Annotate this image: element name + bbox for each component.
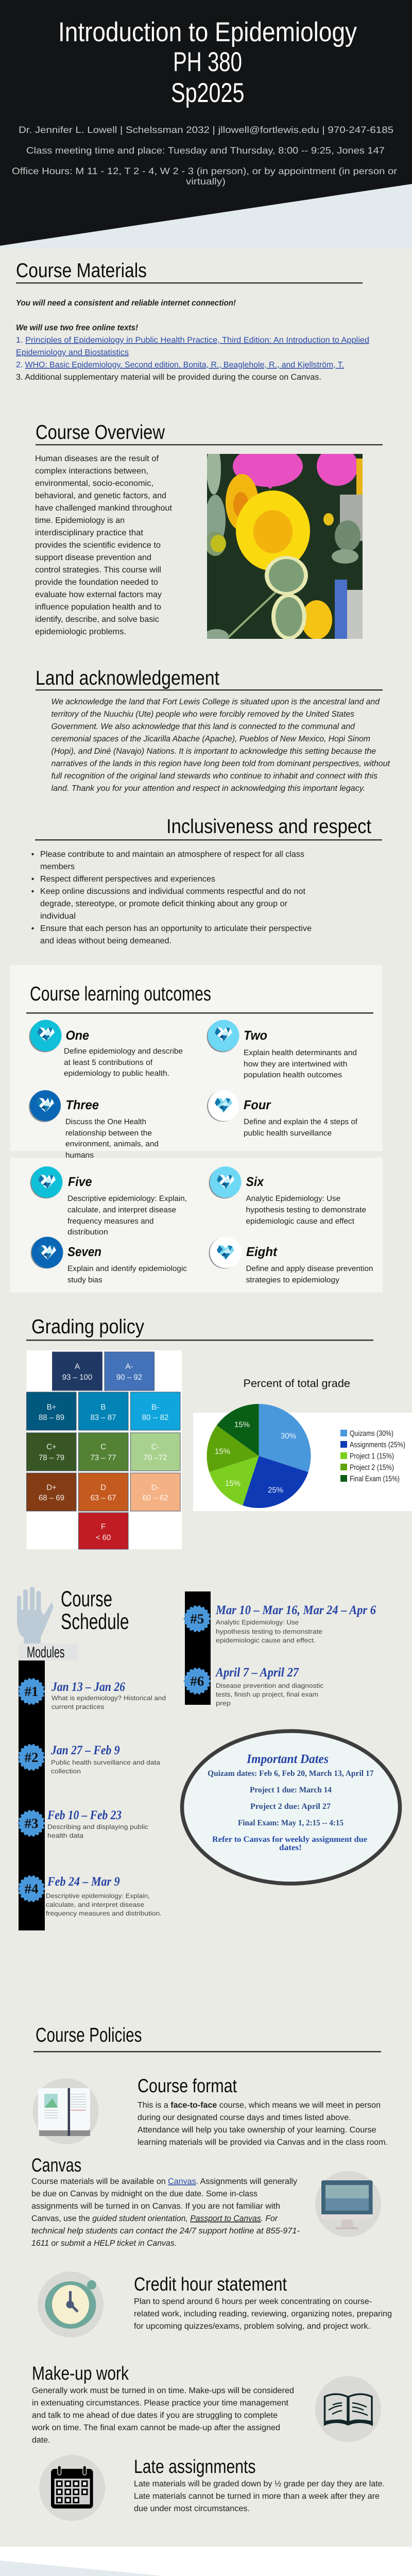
panel: course overview bbox=[35, 421, 383, 643]
outcome six: epidemiologic cause and effect bbox=[246, 1217, 355, 1226]
title: Introduction to Epidemiology bbox=[58, 17, 357, 47]
module 1: Jan 13 – Jan 26 bbox=[51, 1680, 125, 1694]
grade scale table: C+ bbox=[46, 1443, 57, 1451]
callout: important dates bbox=[182, 1731, 400, 1884]
module 6: tests, finish up project, final exam bbox=[216, 1691, 318, 1698]
outcome six bbox=[209, 1166, 366, 1226]
outcome four: Four bbox=[244, 1098, 271, 1112]
module 6 bbox=[185, 1666, 323, 1707]
photo: flowers bbox=[204, 443, 363, 643]
materials text: 1. Principles of Epidemiology in Public Health Practice, Third Edition: An Introduction to Applied bbox=[16, 336, 369, 345]
module 6: Disease prevention and diagnostic bbox=[216, 1682, 323, 1689]
bulleted list: degrade, stereotype, or promote deficit thinking about any group or bbox=[40, 900, 288, 908]
grade scale table: 63 – 67 bbox=[90, 1494, 116, 1502]
overview paragraph: complex interactions between, bbox=[35, 467, 148, 476]
module 4 bbox=[20, 1875, 162, 1917]
heading: course policies: Course Policies bbox=[36, 2024, 142, 2046]
policy: make-up work bbox=[31, 2363, 294, 2445]
grade scale table: 60 – 62 bbox=[142, 1494, 168, 1502]
module 5: Analytic Epidemiology: Use bbox=[216, 1619, 299, 1626]
grade scale table: 80 -- 82 bbox=[142, 1413, 168, 1422]
outcome five: calculate, and interpret disease bbox=[67, 1206, 176, 1214]
overview paragraph: Human diseases are the result of bbox=[35, 454, 159, 463]
callout: important dates: Important Dates bbox=[246, 1752, 329, 1766]
pie chart: percent of total grade bbox=[193, 1404, 412, 1511]
instructor and class details bbox=[12, 125, 397, 187]
bulleted list: individual bbox=[40, 912, 76, 921]
outcome seven: Explain and identify epidemiologic bbox=[67, 1264, 187, 1273]
heading: course schedule: Course bbox=[61, 1587, 112, 1612]
policy: canvas: Course materials will be available on Canvas. Assignments will generally bbox=[31, 2177, 297, 2186]
bulleted list bbox=[31, 850, 312, 945]
module 6: prep bbox=[216, 1700, 231, 1707]
module 6: #6 bbox=[190, 1673, 204, 1689]
outcome one: at least 5 contributions of bbox=[64, 1058, 153, 1067]
overview paragraph bbox=[35, 454, 173, 636]
outcome eight: strategies to epidemiology bbox=[246, 1276, 340, 1284]
materials text: Epidemiology and Biostatistics bbox=[16, 348, 129, 357]
module 1: current practices bbox=[52, 1703, 104, 1710]
policy: canvas: Canvas bbox=[31, 2155, 81, 2176]
outcome two: population health outcomes bbox=[244, 1071, 342, 1079]
overview paragraph: environmental, socio-economic, bbox=[35, 479, 153, 488]
pie chart: percent of total grade: 15% bbox=[234, 1420, 250, 1429]
materials text: We will use two free online texts! bbox=[16, 324, 139, 332]
title: Sp2025 bbox=[171, 78, 244, 108]
outcome three: relationship between the bbox=[65, 1129, 152, 1138]
grade scale table: B+ bbox=[47, 1403, 57, 1412]
outcome two: Two bbox=[244, 1028, 267, 1043]
policy: make-up work: in extenuating circumstances. Please practice your time management bbox=[32, 2399, 289, 2408]
outcome five: Five bbox=[68, 1175, 92, 1189]
acknowledgement text: territory of the Nuuchiu (Ute) people who were forcibly removed by the United States bbox=[52, 710, 354, 719]
policy: canvas bbox=[31, 2155, 300, 2248]
overview paragraph: interdisciplinary practice that bbox=[35, 529, 144, 537]
bulleted list: members bbox=[40, 862, 75, 871]
heading: grading policy: Grading policy bbox=[31, 1316, 144, 1338]
grade scale table: 78 – 79 bbox=[39, 1453, 64, 1462]
overview paragraph: support disease prevention and bbox=[35, 553, 151, 562]
grade scale table: D+ bbox=[46, 1483, 57, 1492]
outcome two bbox=[207, 1020, 357, 1079]
outcome two: Explain health determinants and bbox=[244, 1048, 357, 1057]
pie chart: percent of total grade: 25% bbox=[268, 1486, 283, 1495]
callout: important dates: dates! bbox=[279, 1843, 302, 1852]
panel: course materials bbox=[16, 260, 369, 382]
policy: make-up work: Make-up work bbox=[32, 2363, 129, 2384]
timeline bar: left bbox=[19, 1660, 45, 1930]
panel: course learning outcomes bbox=[10, 965, 383, 1293]
heading: course learning outcomes: Course learning outcomes bbox=[30, 983, 211, 1005]
policy: make-up work: work on time. The final exam cannot be made-up after the assigned bbox=[31, 2424, 280, 2432]
policy: course format: Attendance will help you take ownership of your learning. Course bbox=[138, 2126, 376, 2134]
module 4: #4 bbox=[25, 1881, 38, 1896]
callout: important dates: Quizam dates: Feb 6, Feb 20, March 13, April 17 bbox=[208, 1769, 374, 1778]
heading: course schedule bbox=[61, 1587, 129, 1634]
outcome five bbox=[30, 1166, 187, 1236]
acknowledgement text bbox=[52, 698, 390, 793]
module 5: Mar 10 – Mar 16, Mar 24 – Apr 6 bbox=[215, 1603, 376, 1617]
policy: course format: learning materials will be provided via Canvas and in the class room. bbox=[138, 2138, 388, 2147]
grade scale table: 90 – 92 bbox=[116, 1373, 142, 1382]
chart legend: Quizams (30%) bbox=[350, 1429, 393, 1438]
bulleted list: Respect different perspectives and experiences bbox=[40, 875, 215, 884]
outcome six: Analytic Epidemiology: Use bbox=[246, 1194, 340, 1203]
outcome four bbox=[207, 1090, 358, 1138]
outcome seven: Seven bbox=[67, 1245, 101, 1259]
pie chart: percent of total grade: 30% bbox=[281, 1432, 296, 1440]
module 1: #1 bbox=[25, 1684, 38, 1699]
overview paragraph: provide the foundation needed to bbox=[35, 578, 158, 587]
policy: credit hour statement bbox=[134, 2274, 392, 2331]
policy: make-up work: and talk to me ahead of due dates if you are struggling to complete bbox=[32, 2411, 278, 2420]
acknowledgement text: narratives of the lands in this region have long been told from dominant perspectives, without bbox=[52, 759, 390, 768]
panel: inclusiveness and respect bbox=[31, 816, 382, 945]
overview paragraph: have challenged mankind throughout bbox=[35, 504, 173, 513]
policy: credit hour statement: for upcoming quizzes/exams, problem solving, and project work. bbox=[134, 2322, 370, 2331]
module 3: health data bbox=[47, 1832, 83, 1839]
acknowledgement text: full recognition of the original land stewards who continue to inhabit and connect with this bbox=[52, 772, 377, 781]
module 5 bbox=[185, 1603, 376, 1644]
timeline bar: right bbox=[185, 1591, 211, 1705]
overview paragraph: epidemiologic problems. bbox=[35, 628, 126, 636]
grade scale table: 83 – 87 bbox=[90, 1413, 116, 1422]
grade scale table: < 60 bbox=[96, 1533, 111, 1542]
materials text: 2. WHO: Basic Epidemiology. Second edition. Bonita, R., Beaglehole, R., and Kjellström, T. bbox=[16, 361, 344, 369]
grade scale table: A bbox=[75, 1362, 80, 1371]
policy: canvas: technical help students can contact the 24/7 support hotline at 855-971- bbox=[31, 2227, 300, 2235]
chart legend bbox=[340, 1429, 405, 1483]
icon: calendar bbox=[39, 2455, 105, 2521]
module 3: Describing and displaying public bbox=[47, 1823, 148, 1831]
panel: additional policies bbox=[0, 2561, 412, 2576]
module 3: #3 bbox=[25, 1816, 38, 1831]
module 3 bbox=[20, 1808, 148, 1839]
heading: land acknowledgement: Land acknowledgement bbox=[36, 667, 219, 689]
overview paragraph: influence population health and to bbox=[35, 603, 161, 612]
module 2: collection bbox=[51, 1768, 81, 1775]
module 3: Feb 10 – Feb 23 bbox=[47, 1808, 122, 1822]
outcome eight bbox=[209, 1236, 373, 1284]
callout: important dates: Refer to Canvas for weekly assignment due bbox=[212, 1835, 367, 1844]
outcome one: epidemiology to public health. bbox=[64, 1069, 169, 1078]
policy: late assignments: Late materials will be graded down by ½ grade per day they are late. bbox=[134, 2480, 385, 2488]
instructor and class details: Class meeting time and place: Tuesday and Thursday, 8:00 -- 9:25, Jones 147 bbox=[26, 145, 385, 156]
outcome five: frequency measures and bbox=[67, 1217, 153, 1226]
grade scale table bbox=[27, 1350, 182, 1549]
outcome three: humans bbox=[65, 1151, 94, 1160]
policy: credit hour statement: Plan to spend around 6 hours per week concentrating on course- bbox=[134, 2297, 372, 2306]
overview paragraph: time. Epidemiology is an bbox=[35, 516, 125, 525]
panel: grading policy bbox=[26, 1316, 412, 1549]
heading: course overview: Course Overview bbox=[36, 421, 165, 444]
module 1 bbox=[20, 1680, 166, 1710]
policy: canvas: 1611 or submit a HELP ticket in Canvas. bbox=[31, 2239, 177, 2248]
policy: make-up work: date. bbox=[32, 2436, 50, 2445]
instructor and class details: Office Hours: M 11 - 12, T 2 - 4, W 2 - 3 (in person), or by appointment (in person or bbox=[12, 166, 397, 176]
outcome five: Descriptive epidemiology: Explain, bbox=[67, 1194, 187, 1203]
header banner bbox=[0, 0, 412, 246]
policy: late assignments bbox=[134, 2456, 385, 2513]
outcome two: how they are intertwined with bbox=[244, 1060, 347, 1069]
module 2: Jan 27 – Feb 9 bbox=[50, 1743, 120, 1757]
bulleted list: Please contribute to and maintain an atmosphere of respect for all class bbox=[40, 850, 304, 859]
grade scale table: 70 –72 bbox=[144, 1453, 167, 1462]
policy: canvas: be due on Canvas by midnight on the due date. Some in-class bbox=[31, 2190, 258, 2198]
acknowledgement text: Government. We also acknowledge that this land is connected to the communal and bbox=[52, 722, 355, 731]
chart legend: Project 1 (15%) bbox=[350, 1452, 394, 1461]
module 2: Public health surveillance and data bbox=[51, 1759, 160, 1766]
module 4: frequency measures and distribution. bbox=[46, 1910, 162, 1917]
outcome one: Define epidemiology and describe bbox=[64, 1047, 183, 1056]
policy: canvas: assignments will be turned in on Canvas. If you are not familiar with bbox=[31, 2202, 280, 2211]
policy: course format: during our designated course days and times listed above. bbox=[138, 2113, 351, 2122]
grade scale table: C- bbox=[151, 1443, 159, 1451]
outcome three: Discuss the One Health bbox=[65, 1117, 146, 1126]
pie chart: percent of total grade: 15% bbox=[215, 1447, 230, 1456]
outcome six: hypothesis testing to demonstrate bbox=[246, 1206, 366, 1214]
materials text: 3. Additional supplementary material will be provided during the course on Canvas. bbox=[16, 373, 321, 382]
module 5: epidemiologic cause and effect. bbox=[216, 1637, 316, 1644]
acknowledgement text: land. Thank you for your attention and respect in acknowledging this important legacy. bbox=[52, 784, 365, 793]
policy: credit hour statement: Credit hour statement bbox=[134, 2274, 287, 2295]
policy: course format bbox=[138, 2075, 388, 2147]
policy: course format: This is a face-to-face course, which means we will meet in person bbox=[138, 2101, 381, 2110]
policy: late assignments: Late materials cannot be turned in more than a week after they are bbox=[134, 2492, 380, 2501]
outcome six: Six bbox=[246, 1175, 264, 1189]
outcome one bbox=[29, 1020, 183, 1078]
bulleted list: Ensure that each person has an opportunity to articulate their perspective bbox=[40, 924, 312, 933]
outcome three bbox=[29, 1090, 159, 1160]
outcome eight: Eight bbox=[246, 1245, 278, 1259]
outcome seven bbox=[31, 1236, 187, 1284]
panel: land acknowledgement bbox=[36, 667, 390, 793]
module 4: Descriptive epidemiology: Explain, bbox=[46, 1892, 150, 1900]
module 5: hypothesis testing to demonstrate bbox=[216, 1628, 322, 1635]
title: PH 380 bbox=[173, 47, 242, 77]
policy: course format: Course format bbox=[138, 2075, 237, 2096]
acknowledgement text: ceremonial spaces of the Jicarilla Abache (Apache), Pueblos of New Mexico, Hopi Sinom bbox=[52, 735, 370, 743]
outcome eight: Define and apply disease prevention bbox=[246, 1264, 373, 1273]
callout: important dates: Project 2 due: April 27 bbox=[250, 1802, 331, 1811]
instructor and class details: Dr. Jennifer L. Lowell | Schelssman 2032 | jllowell@fortlewis.edu | 970-247-6185 bbox=[19, 125, 393, 135]
acknowledgement text: We acknowledge the land that Fort Lewis College is situated upon is the ancestral land and bbox=[52, 698, 380, 706]
title bbox=[58, 17, 357, 108]
grade scale table: D- bbox=[151, 1483, 159, 1492]
outcome one: One bbox=[66, 1028, 89, 1043]
heading: inclusiveness and respect: Inclusiveness and respect bbox=[166, 816, 371, 838]
policy: credit hour statement: related work, including reading, reviewing, organizing notes, preparing bbox=[134, 2310, 392, 2318]
module 2 bbox=[20, 1743, 160, 1775]
icon: open book bbox=[33, 2078, 99, 2144]
grade scale table: 73 – 77 bbox=[90, 1453, 116, 1462]
overview paragraph: behavioral, and genetic factors, and bbox=[35, 492, 166, 500]
module 2: #2 bbox=[25, 1750, 38, 1765]
chart title: Percent of total grade bbox=[243, 1378, 350, 1389]
grade scale table: B- bbox=[151, 1403, 159, 1412]
instructor and class details: virtually) bbox=[186, 176, 226, 187]
icon: book outline bbox=[315, 2376, 381, 2442]
grade scale table: D bbox=[100, 1483, 106, 1492]
callout: important dates: Project 1 due: March 14 bbox=[250, 1786, 332, 1794]
grade scale table: 93 – 100 bbox=[62, 1373, 92, 1382]
overview paragraph: control strategies. This course will bbox=[35, 566, 161, 574]
outcome three: Three bbox=[66, 1098, 99, 1112]
panel: course policies bbox=[31, 2024, 392, 2521]
outcome four: Define and explain the 4 steps of bbox=[244, 1117, 358, 1126]
policy: make-up work: Generally work must be turned in on time. Make-ups will be considered bbox=[32, 2386, 294, 2395]
callout: important dates: Final Exam: May 1, 2:15 -- 4:15 bbox=[238, 1819, 344, 1827]
acknowledgement text: (Hopi), and Diné (Navajo) Nations. It is important to acknowledge this setting because the bbox=[52, 747, 376, 756]
module 4: Feb 24 – Mar 9 bbox=[47, 1875, 120, 1889]
module 4: calculate, and interpret disease bbox=[46, 1901, 144, 1908]
heading: course materials: Course Materials bbox=[16, 260, 147, 282]
pie chart: percent of total grade: 15% bbox=[225, 1479, 241, 1488]
overview paragraph: provides the scientific evidence to bbox=[35, 541, 161, 550]
outcome seven: study bias bbox=[67, 1276, 102, 1284]
policy: late assignments: Late assignments bbox=[134, 2456, 255, 2477]
outcome five: distribution bbox=[67, 1228, 108, 1236]
grade scale table: F bbox=[101, 1522, 106, 1531]
outcome four: public health surveillance bbox=[244, 1129, 332, 1138]
icon: computer monitor bbox=[315, 2171, 381, 2237]
grade scale table: C bbox=[100, 1443, 106, 1451]
module 5: #5 bbox=[190, 1611, 204, 1626]
heading: course schedule: Schedule bbox=[61, 1609, 129, 1634]
materials text bbox=[16, 299, 369, 382]
icon: stopwatch bbox=[38, 2272, 104, 2337]
chart legend: Final Exam (15%) bbox=[350, 1475, 400, 1483]
overview paragraph: evaluate how external factors may bbox=[35, 590, 162, 599]
modules tab: Modules bbox=[27, 1644, 65, 1661]
module 6: April 7 – April 27 bbox=[215, 1666, 299, 1680]
icon: raised hand bbox=[17, 1587, 54, 1643]
grade scale table: B bbox=[100, 1403, 106, 1412]
materials text: You will need a consistent and reliable internet connection! bbox=[16, 299, 236, 308]
module 1: What is epidemiology? Historical and bbox=[52, 1694, 166, 1702]
grade scale table: 68 – 69 bbox=[39, 1494, 64, 1502]
outcome three: environment, animals, and bbox=[65, 1140, 159, 1148]
bulleted list: and ideas without being demeaned. bbox=[40, 937, 171, 945]
bulleted list: Keep online discussions and individual comments respectful and do not bbox=[40, 887, 306, 896]
chart legend: Project 2 (15%) bbox=[350, 1463, 394, 1472]
grade scale table: 88 – 89 bbox=[39, 1413, 64, 1422]
policy: late assignments: due under most circumstances. bbox=[134, 2504, 250, 2513]
panel: course schedule bbox=[17, 1587, 400, 1930]
overview paragraph: identify, describe, and solve basic bbox=[35, 615, 159, 624]
grade scale table: A- bbox=[126, 1362, 133, 1371]
policy: canvas: Canvas, use the guided student orientation, Passport to Canvas. For bbox=[31, 2214, 278, 2223]
